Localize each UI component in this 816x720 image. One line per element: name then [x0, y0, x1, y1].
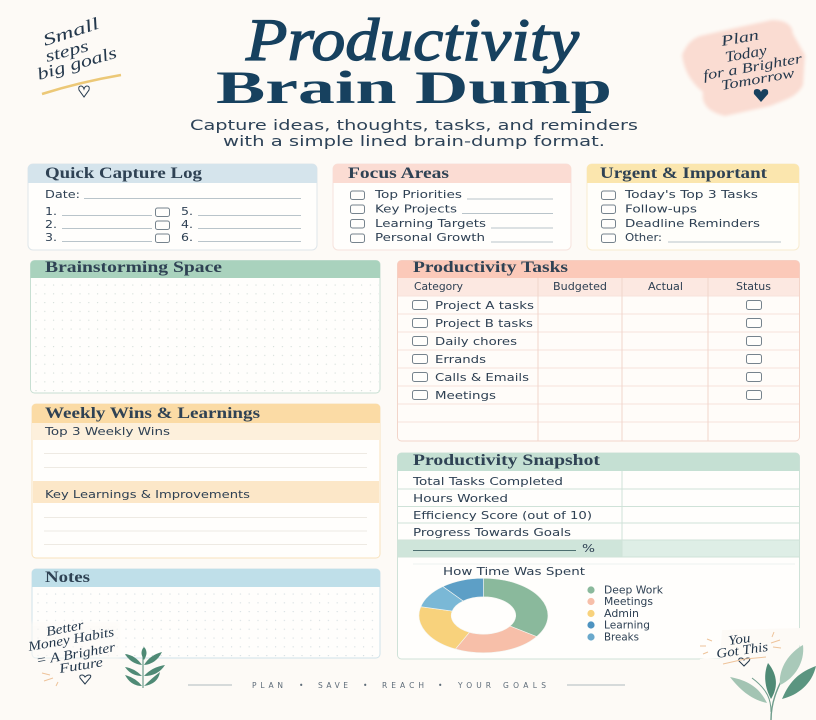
task rows: Daily chores [435, 336, 517, 348]
chart legend [587, 584, 664, 644]
header: notes [32, 569, 380, 587]
note: better money habits: Better [45, 617, 86, 639]
note: small steps big goals: steps [43, 36, 91, 66]
panel: quick capture log: 3. [45, 232, 57, 244]
panel: urgent and important: Other: [625, 232, 662, 244]
task rows: Meetings [435, 390, 496, 402]
subtitle [190, 118, 638, 150]
column headers: Status [736, 281, 771, 293]
panel: brainstorming space [30, 259, 380, 393]
chart legend: Meetings [604, 596, 653, 608]
note: plan today: for a Brighter [702, 52, 804, 84]
footer tagline: • [438, 681, 442, 690]
chart legend: Admin [604, 608, 639, 620]
title: Productivity [245, 7, 579, 73]
panel: urgent and important: Urgent & Important [600, 165, 768, 182]
header: productivity tasks [398, 260, 800, 278]
note: you got this: You [727, 630, 751, 648]
panel: weekly wins and learnings [32, 404, 380, 558]
panel: weekly wins and learnings: Key Learnings & Improvements [45, 489, 250, 501]
note: you got this: Got This [715, 639, 769, 661]
note: small steps big goals [35, 14, 121, 97]
panel: quick capture log: 5. [181, 206, 193, 218]
icon: leaf sprig [125, 647, 165, 688]
note: you got this [695, 628, 816, 720]
panel: focus areas: Learning Targets [375, 218, 486, 230]
footer tagline: PLAN [252, 681, 283, 690]
note: plan today: Today [724, 43, 768, 66]
task rows: Project B tasks [435, 318, 533, 330]
panel: productivity tasks [398, 259, 800, 441]
note: plan today: Tomorrow [720, 66, 796, 94]
panel: productivity snapshot: % [582, 543, 595, 555]
panel: productivity snapshot: Progress Towards Goals [413, 527, 571, 539]
panel: productivity snapshot: Efficiency Score (out of 10) [413, 510, 592, 522]
footer tagline [188, 681, 625, 690]
panel: quick capture log: 4. [181, 219, 193, 231]
panel: productivity tasks: Productivity Tasks [413, 259, 568, 276]
panel: urgent and important: Follow-ups [625, 204, 697, 216]
column headers: Actual [648, 281, 683, 293]
panel: focus areas: Top Priorities [374, 189, 462, 201]
panel: weekly wins and learnings: Top 3 Weekly Wins [44, 426, 170, 438]
note: plan today [682, 20, 805, 116]
chart legend: Deep Work [604, 584, 664, 596]
title: Brain Dump [216, 62, 612, 114]
header: productivity snapshot [398, 453, 800, 471]
column headers: Category [414, 281, 463, 293]
panel: focus areas: Personal Growth [375, 232, 485, 244]
footer tagline: • [363, 681, 367, 690]
panel: focus areas: Focus Areas [348, 165, 449, 182]
panel: focus areas: Key Projects [375, 204, 457, 216]
task rows [412, 300, 762, 402]
task rows: Errands [435, 354, 486, 366]
panel: quick capture log [28, 164, 317, 250]
panel: urgent and important: Today's Top 3 Tasks [624, 189, 758, 201]
panel: productivity snapshot: Total Tasks Completed [412, 476, 563, 488]
panel: productivity snapshot: Hours Worked [413, 493, 508, 505]
note: plan today: Plan [719, 28, 760, 50]
note: better money habits: Future [57, 654, 104, 676]
panel: weekly wins and learnings: Weekly Wins & Learnings [45, 405, 260, 422]
header: focus areas [333, 164, 571, 183]
panel: productivity snapshot: Productivity Snapshot [413, 452, 601, 469]
title [216, 7, 612, 114]
note: better money habits: = A Brighter [35, 639, 117, 668]
note: better money habits: Money Habits [26, 624, 115, 654]
panel: quick capture log: 2. [45, 219, 57, 231]
panel: productivity snapshot [398, 452, 800, 659]
donut chart: how time was spent: How Time Was Spent [443, 566, 585, 578]
panel: quick capture log: Date: [45, 189, 80, 201]
task rows: Calls & Emails [435, 372, 529, 384]
task rows: Project A tasks [435, 300, 534, 312]
footer tagline: GOALS [503, 681, 546, 690]
header: brainstorming space [30, 260, 380, 278]
subtitle: with a simple lined brain-dump format. [223, 134, 605, 150]
panel: urgent and important: Deadline Reminders [625, 218, 760, 230]
header: weekly wins [32, 404, 380, 423]
icon: corner leaves [730, 645, 816, 720]
donut chart: how time was spent [419, 566, 585, 653]
note: small steps big goals: Small [40, 14, 102, 50]
header: quick capture log [28, 164, 317, 183]
note: better money habits [26, 617, 120, 686]
chart legend: Learning [604, 620, 650, 632]
column headers [414, 281, 771, 293]
panel: quick capture log: 6. [181, 232, 193, 244]
panel: quick capture log: Quick Capture Log [45, 165, 202, 182]
panel: quick capture log: 1. [45, 206, 57, 218]
panel: notes: Notes [45, 569, 90, 586]
panel: focus areas [333, 164, 571, 250]
panel: brainstorming space: Brainstorming Space [45, 259, 222, 276]
subtitle: Capture ideas, thoughts, tasks, and reminders [190, 118, 638, 134]
footer tagline: • [299, 681, 303, 690]
panel: urgent and important [587, 164, 799, 250]
panel: notes [32, 569, 380, 658]
note: small steps big goals: big goals [35, 43, 119, 84]
chart legend: Breaks [604, 632, 639, 644]
footer tagline: REACH [382, 681, 424, 690]
footer tagline: SAVE [318, 681, 348, 690]
footer tagline: YOUR [457, 681, 491, 690]
column headers: Budgeted [553, 281, 607, 293]
header: urgent and important [587, 164, 799, 183]
